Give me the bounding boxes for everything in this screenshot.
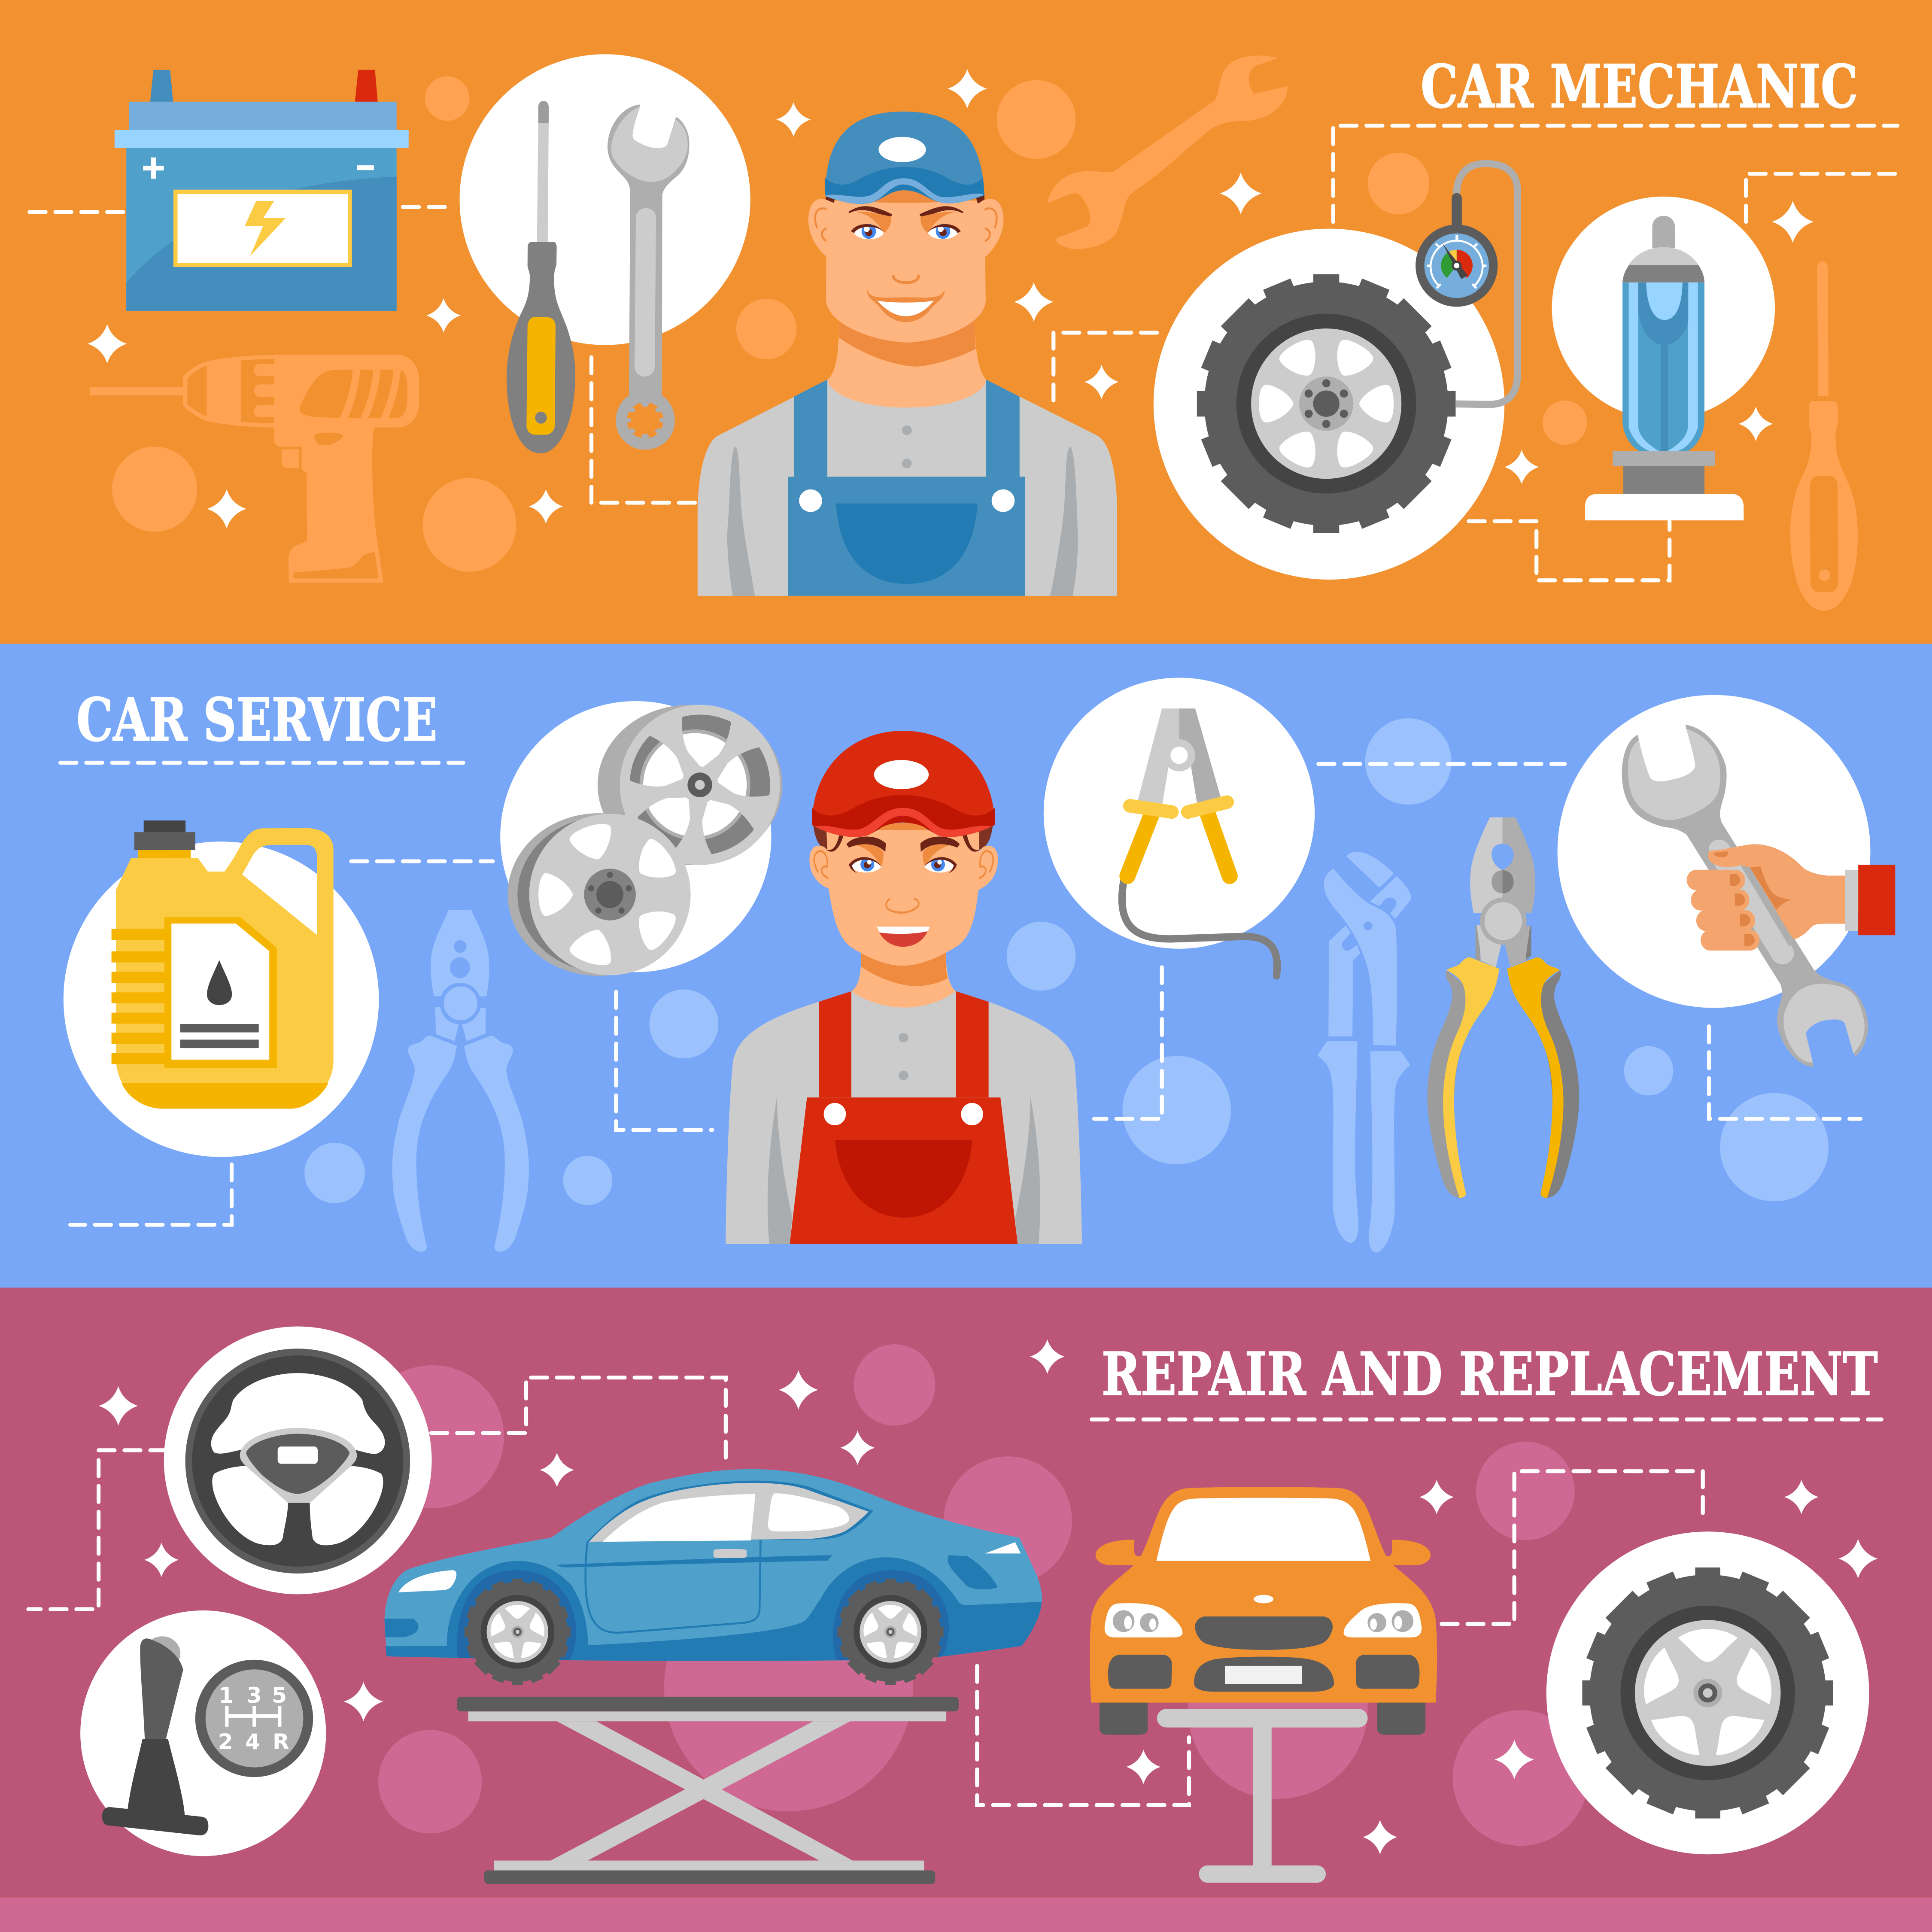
white icon circles — [64, 677, 1871, 1157]
icon: drill silhouette — [90, 355, 419, 583]
connector dashes — [61, 762, 1861, 1225]
bottom strip — [0, 1898, 1932, 1932]
icon: wrench silhouette — [1047, 55, 1288, 249]
icon: combination wrench — [608, 104, 690, 450]
icon: battery clamp — [1122, 708, 1277, 976]
pale circles — [361, 1344, 1588, 1846]
icon: car battery — [115, 70, 409, 311]
icon: blue car on lift — [384, 1469, 1042, 1685]
orange panel contents — [30, 52, 1898, 611]
gear pattern numbers — [218, 1683, 289, 1754]
blue panel contents — [61, 677, 1895, 1253]
pale circles — [112, 76, 1587, 572]
connector dashes — [30, 126, 1898, 580]
icon: pliers silhouette — [392, 910, 529, 1252]
icon: alloy rims — [507, 705, 782, 976]
icon: scissor lift — [457, 1697, 959, 1884]
icon: combination pliers — [1427, 817, 1579, 1198]
rear rim — [598, 705, 782, 865]
connector dashes — [28, 1378, 1881, 1805]
icon: hand holding wrench — [1622, 725, 1895, 1067]
icon: gear shift lever — [102, 1636, 313, 1835]
icon: screwdriver silhouette — [1790, 261, 1858, 611]
title: car service: CAR SERVICE — [76, 686, 437, 755]
pale circles — [304, 718, 1829, 1205]
icon: replacement wheel — [1582, 1567, 1833, 1819]
panel: car mechanic background — [0, 0, 1932, 644]
figure: mechanic in blue overalls — [698, 112, 1117, 596]
magenta panel contents — [28, 1326, 1881, 1884]
gear pattern numbers: 5 — [272, 1683, 287, 1708]
figure: mechanic in red overalls — [726, 731, 1082, 1244]
sparkles — [99, 1340, 1878, 1854]
icon: steering wheel — [185, 1349, 410, 1574]
gear pattern numbers: R — [273, 1729, 289, 1754]
icon: tyre — [1197, 274, 1455, 533]
gear pattern numbers: 2 — [218, 1729, 233, 1754]
icon: tyre pressure gauge — [1416, 164, 1517, 404]
panel: repair and replacement background — [0, 1288, 1932, 1898]
icon: orange car front view — [1090, 1487, 1437, 1735]
front rim — [507, 813, 691, 976]
icon: water pump pliers silhouette — [1318, 852, 1411, 1253]
gear pattern numbers: 4 — [245, 1729, 260, 1754]
white icon circles — [80, 1326, 1869, 1856]
panel: car service background — [0, 644, 1932, 1288]
white icon circles — [459, 54, 1775, 580]
icon: screwdriver — [507, 101, 575, 453]
icon: headlight bulb — [1585, 216, 1744, 520]
icon: post lift — [1157, 1709, 1368, 1883]
sparkles — [88, 69, 1814, 529]
gear pattern numbers: 1 — [219, 1683, 234, 1708]
gear pattern numbers: 3 — [247, 1683, 262, 1708]
icon: oil canister — [112, 820, 334, 1109]
